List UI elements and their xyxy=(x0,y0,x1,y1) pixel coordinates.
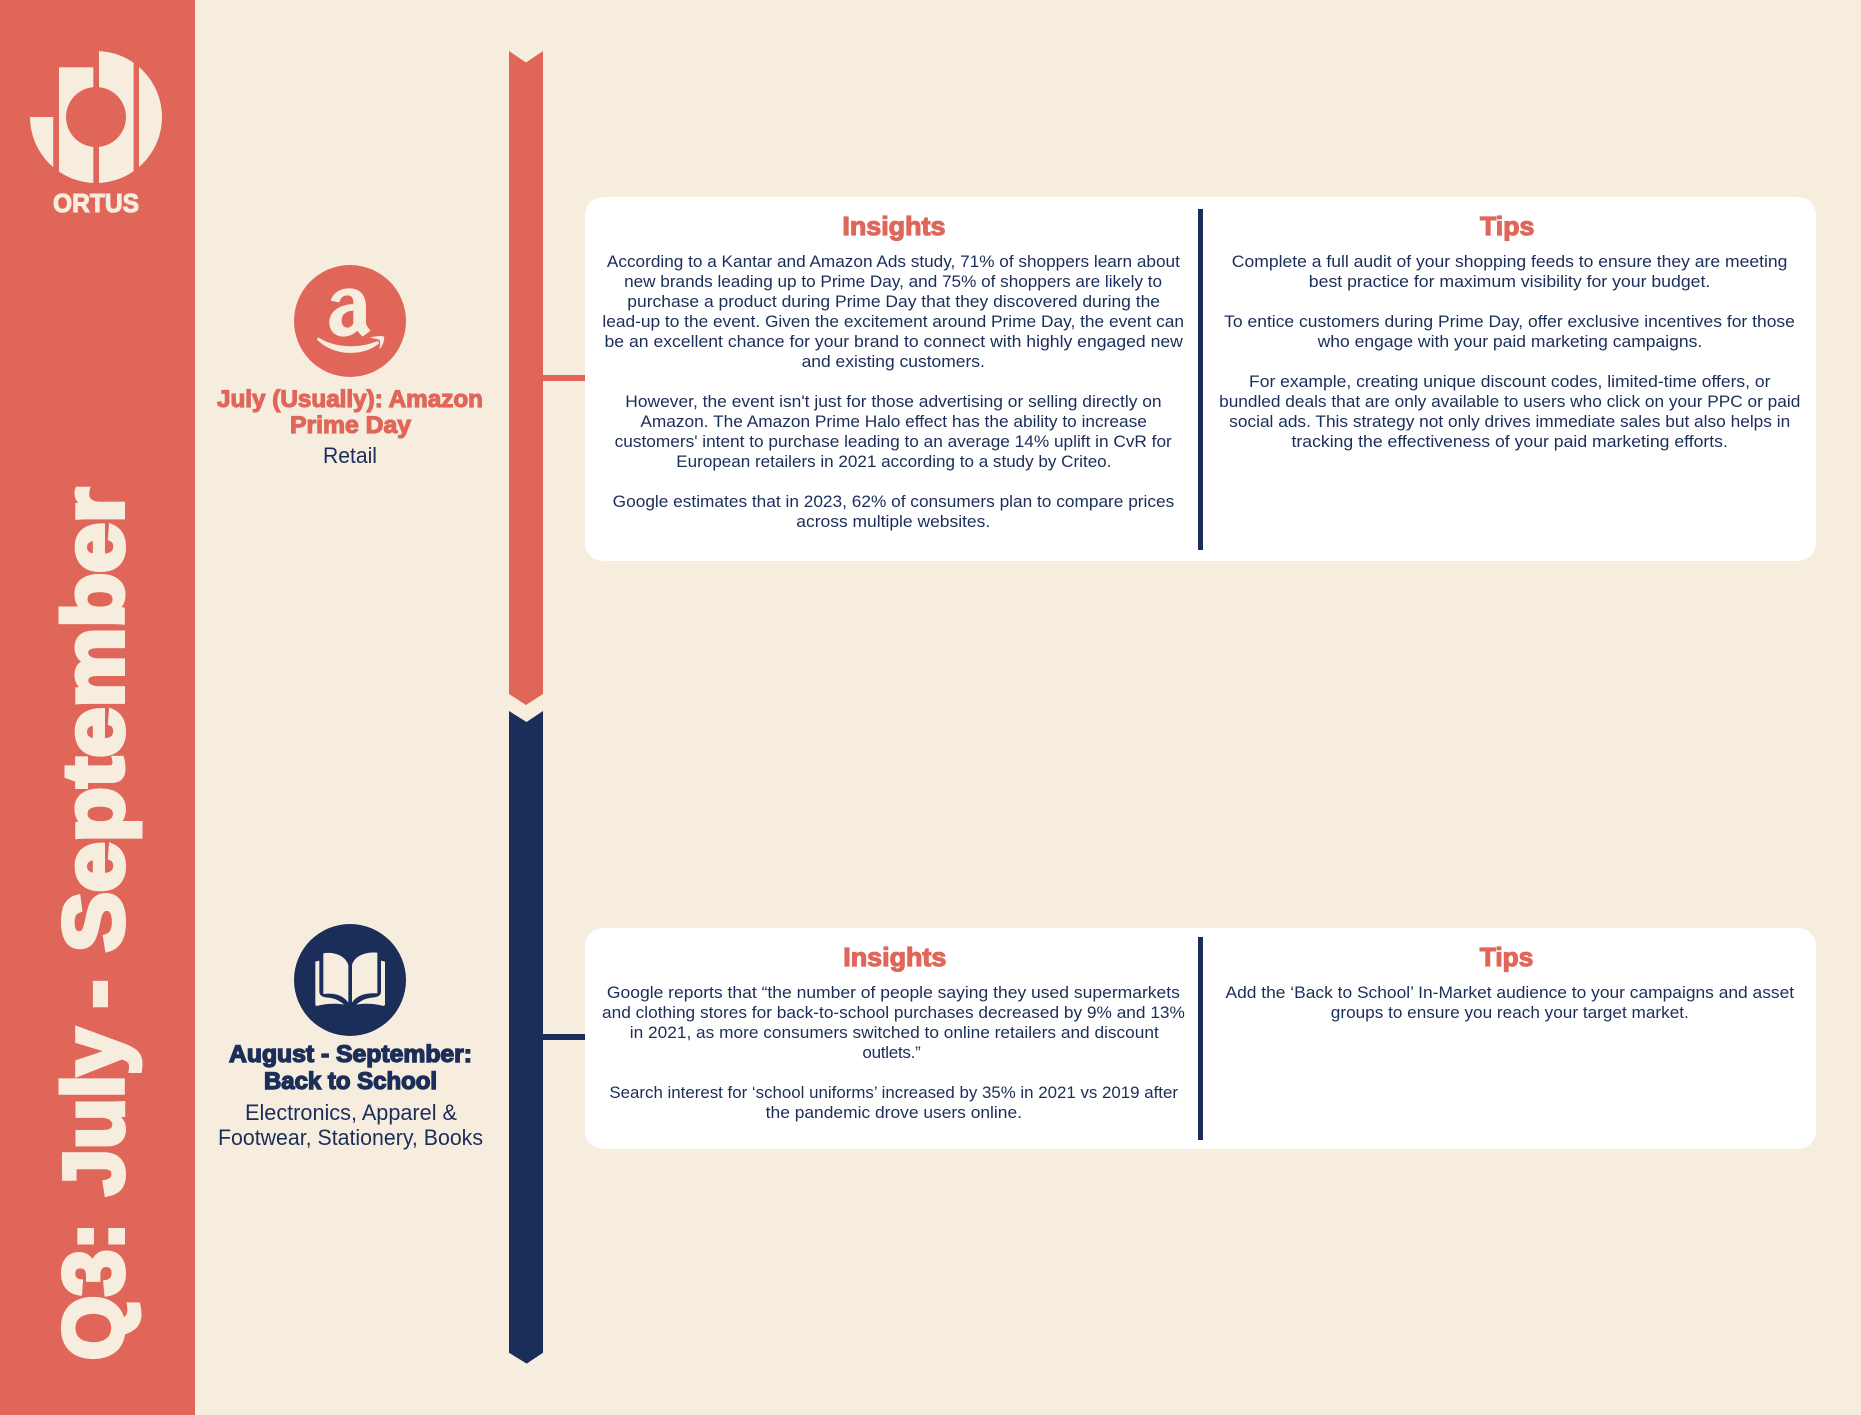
heading: Tips: Tips xyxy=(1480,942,1533,972)
text block: Prime Day insights: lead-up to the event. Given the excitement around Prime Day, the event can xyxy=(602,312,1184,331)
title: Q3 July - September (vertical): - xyxy=(46,980,140,1008)
logo: Ortus: ORTUS xyxy=(53,188,139,218)
text block: Prime Day insights: new brands leading up to Prime Day, and 75% of shoppers are likely to xyxy=(624,272,1162,291)
text block: Prime Day insights: be an excellent chance for your brand to connect with highly engaged new xyxy=(604,332,1184,351)
text block: Prime Day insights: Google estimates that in 2023, 62% of consumers plan to compare prices xyxy=(613,492,1174,511)
text block: Back to School insights: the pandemic drove users online. xyxy=(766,1103,1022,1122)
text block: Prime Day insights: and existing customers. xyxy=(802,352,985,371)
panel: Prime Day insights and tips xyxy=(585,197,1816,561)
text block: Prime Day tips: To entice customers during Prime Day, offer exclusive incentives for those xyxy=(1224,312,1795,331)
text block: Prime Day tips: tracking the effectiveness of your paid marketing efforts. xyxy=(1292,432,1728,451)
heading: July (Usually): Amazon Prime Day: July (Usually): Amazon xyxy=(217,386,483,413)
text block: Prime Day insights: Amazon. The Amazon Prime Halo effect has the ability to increase xyxy=(640,412,1147,431)
sector: Retail: Retail xyxy=(323,443,377,468)
text block: Prime Day insights: However, the event isn't just for those advertising or selling directly on xyxy=(625,392,1162,411)
divider xyxy=(1198,209,1203,550)
text block: Prime Day insights: According to a Kantar and Amazon Ads study, 71% of shoppers learn about xyxy=(607,252,1180,271)
timeline ribbon: navy xyxy=(509,711,543,1364)
panel: Back to School insights and tips xyxy=(585,928,1816,1149)
text block: Back to School tips: Add the ‘Back to School’ In-Market audience to your campaigns and asset xyxy=(1226,983,1794,1002)
icon: Amazon logo circle xyxy=(294,265,406,377)
text block: Back to School insights: and clothing stores for back-to-school purchases decreased by 9% and 13% xyxy=(602,1003,1185,1022)
event: Amazon Prime Day xyxy=(217,265,483,468)
panel: left sidebar xyxy=(0,0,195,1415)
title: Q3 July - September (vertical): July xyxy=(46,1028,140,1196)
sectors: Electronics, Apparel, Footwear, Stationery, Books: Footwear, Stationery, Books xyxy=(218,1125,483,1150)
text block: Back to School insights: Search interest for ‘school uniforms’ increased by 35% in 2021 vs 2019 after xyxy=(609,1083,1178,1102)
timeline ribbon: red xyxy=(509,51,543,705)
text block: Prime Day tips: Complete a full audit of your shopping feeds to ensure they are meeting xyxy=(1232,252,1787,271)
connector: navy xyxy=(543,1034,586,1040)
connector: red xyxy=(543,375,586,381)
text block: Back to School insights: Google reports that “the number of people saying they used supermarkets xyxy=(607,983,1180,1002)
text block: Prime Day insights: purchase a product during Prime Day that they discovered during the xyxy=(627,292,1160,311)
text block: Prime Day insights: customers' intent to purchase leading to an average 14% uplift in CvR for xyxy=(615,432,1172,451)
heading: Tips: Tips xyxy=(1480,211,1534,241)
heading: Insights: Insights xyxy=(843,942,946,972)
heading: August - September: Back to School: Back to School xyxy=(264,1068,437,1095)
icon: open book circle xyxy=(294,924,406,1036)
heading: Insights: Insights xyxy=(842,211,945,241)
text block: Prime Day tips: social ads. This strategy not only drives immediate sales but also helps in xyxy=(1229,412,1790,431)
heading: July (Usually): Amazon Prime Day: Prime Day xyxy=(290,412,412,439)
heading: August - September: Back to School: August - September: xyxy=(229,1041,472,1068)
divider xyxy=(1198,937,1203,1140)
logo: Ortus xyxy=(30,50,163,218)
sectors: Electronics, Apparel, Footwear, Stationery, Books: Electronics, Apparel & xyxy=(245,1100,457,1125)
text block: Prime Day insights: European retailers in 2021 according to a study by Criteo. xyxy=(676,452,1111,471)
text block: Back to School tips: groups to ensure you reach your target market. xyxy=(1331,1003,1689,1022)
text block: Back to School insights: outlets.” xyxy=(862,1043,921,1062)
text block: Prime Day tips: bundled deals that are only available to users who click on your PPC or paid xyxy=(1219,392,1800,411)
text block: Prime Day tips: For example, creating unique discount codes, limited-time offers, or xyxy=(1249,372,1771,391)
text block: Prime Day tips: best practice for maximum visibility for your budget. xyxy=(1309,272,1710,291)
title: Q3 July - September (vertical): Q3: xyxy=(46,1222,140,1360)
text block: Prime Day insights: across multiple websites. xyxy=(796,512,990,531)
title: Q3 July - September (vertical): September xyxy=(46,488,140,952)
text block: Back to School insights: in 2021, as more consumers switched to online retailers and discount xyxy=(630,1023,1159,1042)
text block: Prime Day tips: who engage with your paid marketing campaigns. xyxy=(1317,332,1702,351)
event: Back to School xyxy=(218,924,483,1150)
